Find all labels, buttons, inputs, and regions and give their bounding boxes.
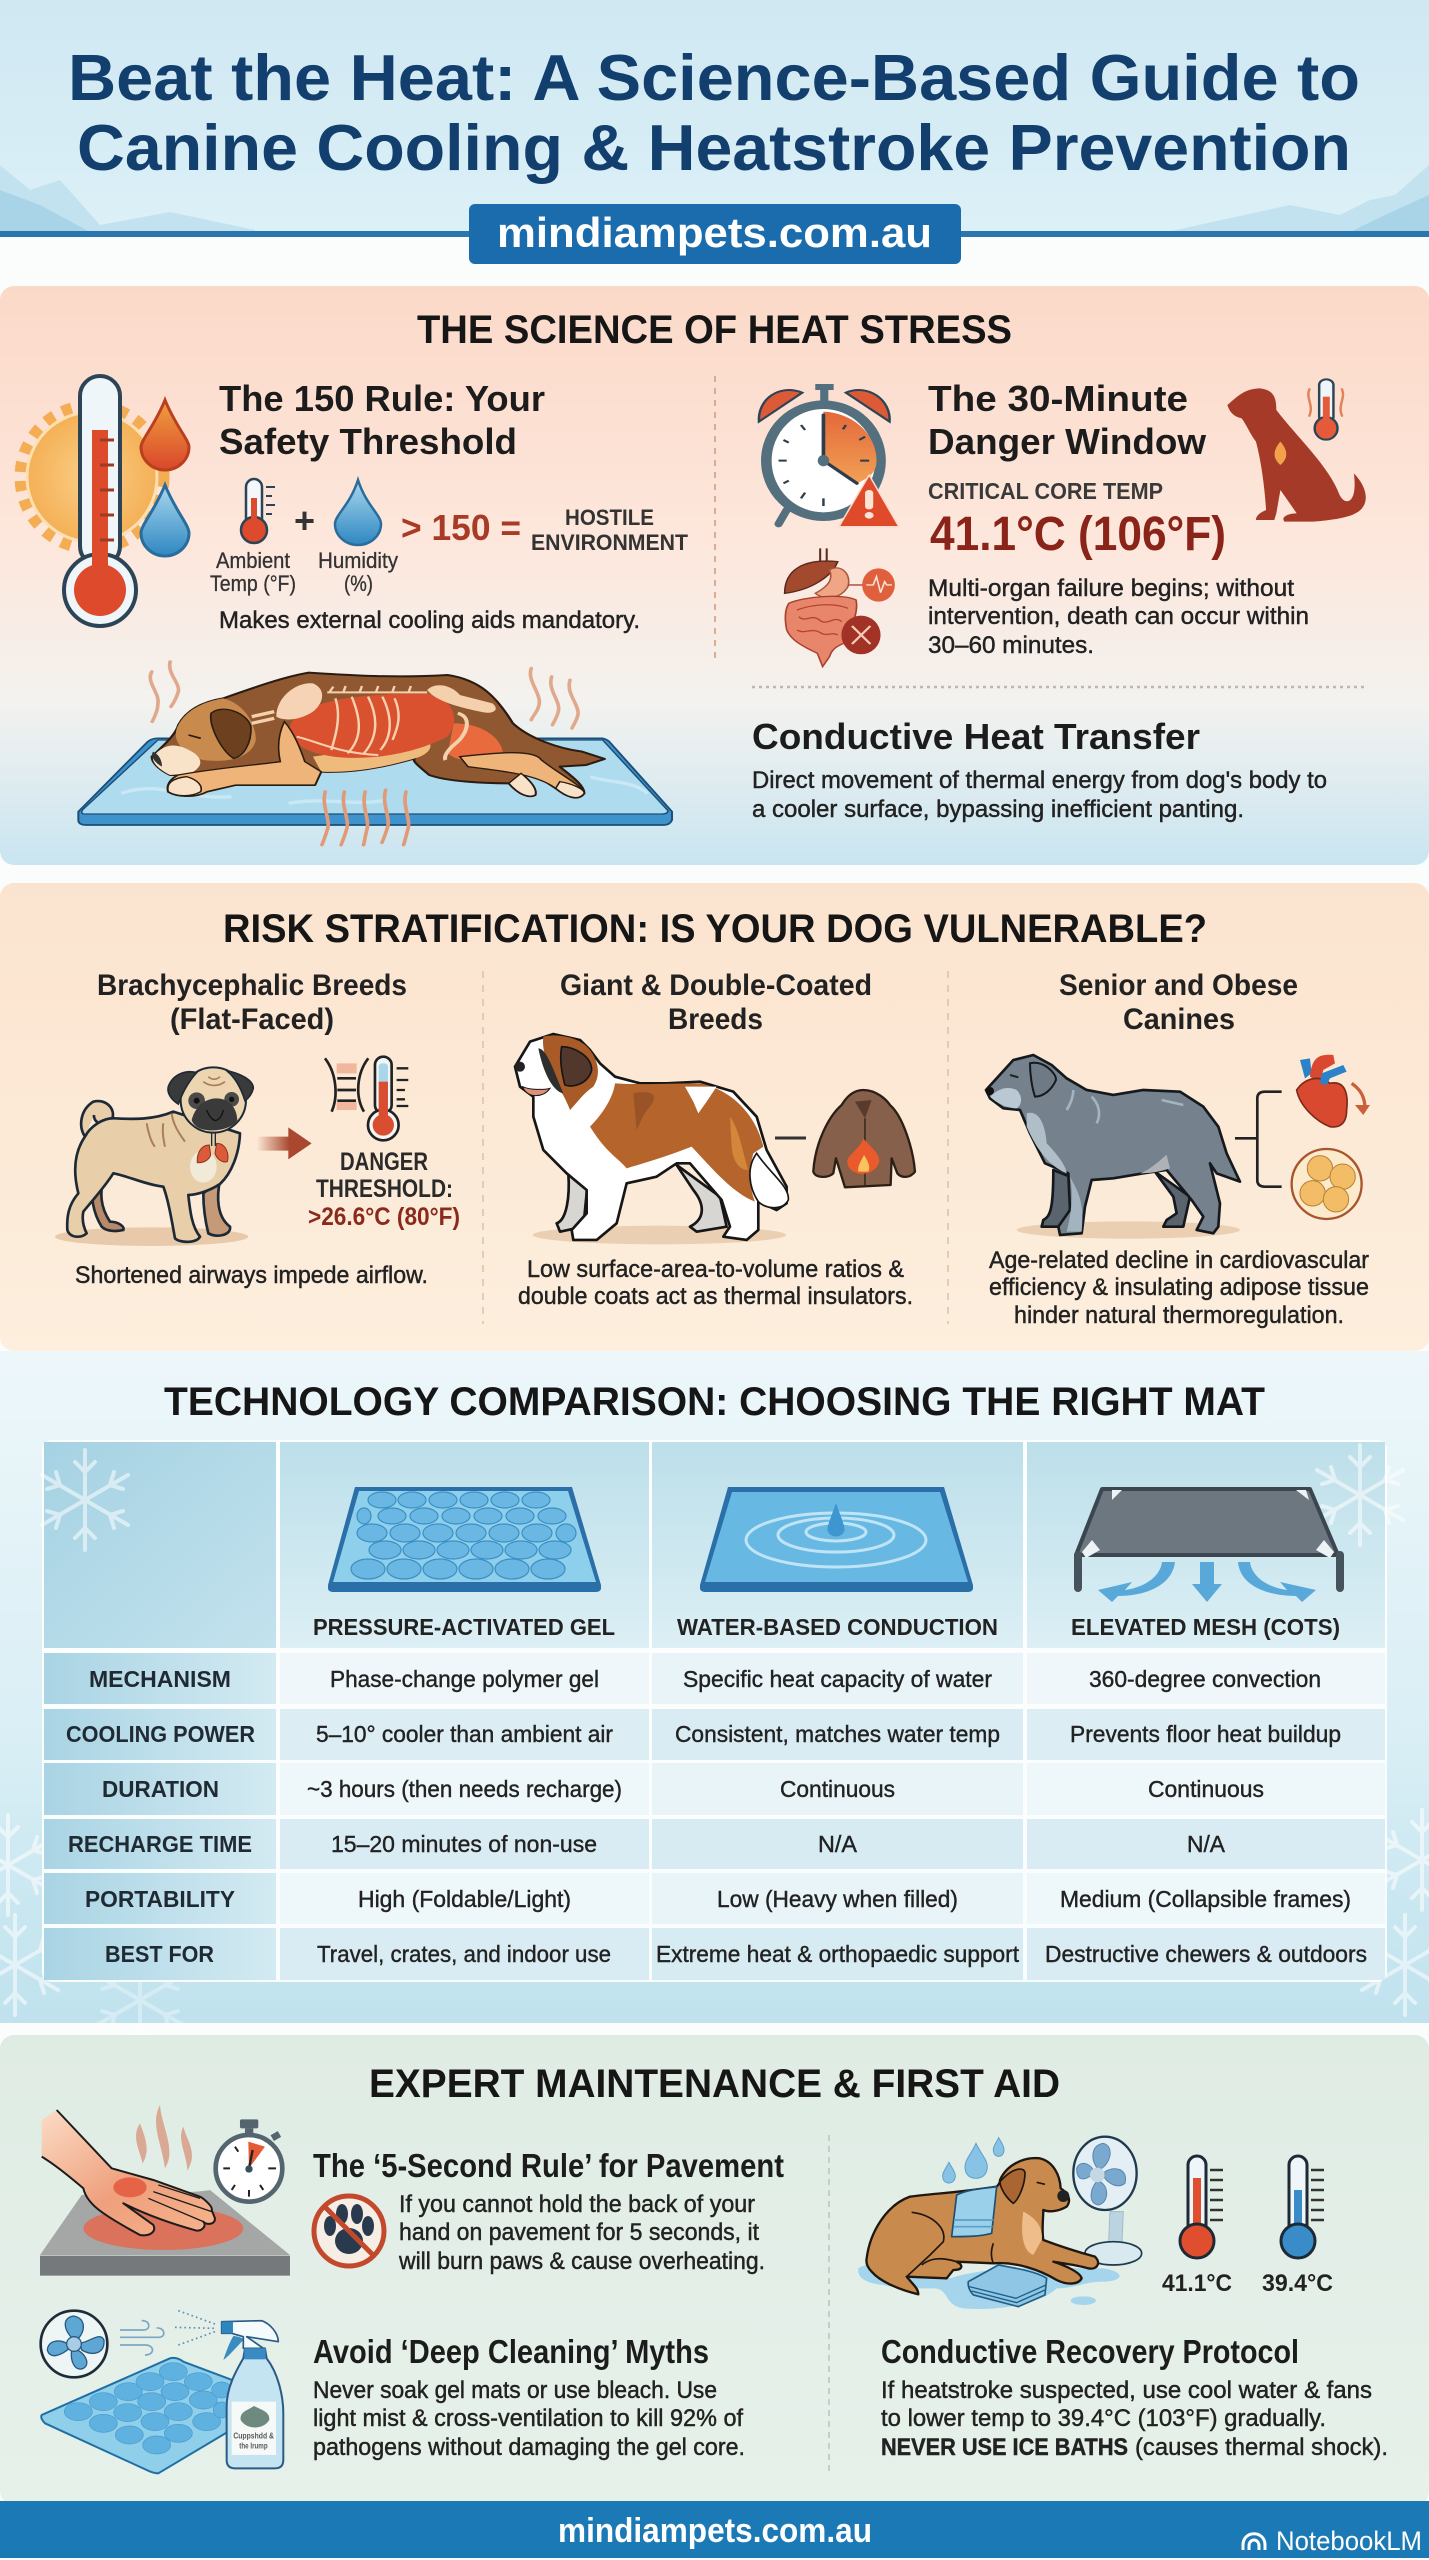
row labels	[66, 1666, 255, 1967]
icon: gel mat	[328, 1487, 601, 1592]
website pill: mindiampets.com.au	[497, 209, 932, 256]
column headers: WATER-BASED CONDUCTION	[677, 1614, 998, 1640]
labels: thermometer values: 39.4°C	[1262, 2270, 1333, 2297]
heading: senior and obese: Senior and Obese	[1059, 969, 1298, 1002]
column values: water: N/A	[818, 1831, 858, 1857]
heading: giant breeds: Giant & Double-Coated	[560, 969, 872, 1002]
column values: water: Specific heat capacity of water	[683, 1666, 992, 1692]
column values: water: Continuous	[780, 1776, 895, 1802]
icon: heart	[1297, 1055, 1370, 1127]
column values: water: Low (Heavy when filled)	[717, 1886, 958, 1912]
text: deep cleaning: pathogens without damaging the gel core.	[313, 2434, 745, 2461]
text: deep cleaning: Never soak gel mats or use bleach. Use	[313, 2377, 717, 2404]
row labels: MECHANISM	[89, 1666, 231, 1692]
icon: gel mat diamond	[41, 2358, 237, 2473]
column values: mesh: 360-degree convection	[1089, 1666, 1321, 1692]
text: recovery protocol: If heatstroke suspected, use cool water & fans	[881, 2377, 1372, 2404]
text: shortened airways: Shortened airways impede airflow.	[75, 1262, 428, 1289]
text: 5-second rule: hand on pavement for 5 seconds, it	[399, 2219, 759, 2246]
heading: 150 rule	[219, 378, 545, 462]
heading: 150 rule: The 150 Rule: Your	[219, 378, 545, 419]
label: notebooklm: NotebookLM	[1276, 2526, 1422, 2556]
column values: gel: Travel, crates, and indoor use	[317, 1941, 611, 1967]
icon: notebooklm logo	[1243, 2534, 1265, 2550]
column values: gel: High (Foldable/Light)	[358, 1886, 571, 1912]
bracket: dog to risk factors	[1235, 1092, 1282, 1187]
arrow: pug to danger	[257, 1127, 312, 1159]
icon: spray bottle	[222, 2321, 283, 2468]
heading: recovery protocol: Conductive Recovery Protocol	[881, 2333, 1299, 2370]
label: danger threshold: >26.6°C (80°F)	[308, 1203, 460, 1231]
icon: air and mist	[120, 2311, 215, 2355]
header band	[0, 0, 1429, 237]
labels: ambient temp and humidity: Temp (°F)	[210, 571, 296, 596]
website pill	[469, 204, 961, 264]
icon: humidity drop	[335, 480, 381, 545]
heading: deep cleaning myths: Avoid ‘Deep Cleaning’ Myths	[313, 2333, 709, 2370]
text: deep cleaning: light mist & cross-ventilation to kill 92% of	[313, 2405, 743, 2432]
icon: no paw	[314, 2196, 384, 2266]
text: senior explanation: Age-related decline in cardiovascular	[989, 1247, 1369, 1274]
heading: maintenance: EXPERT MAINTENANCE & FIRST AID	[369, 2062, 1060, 2106]
text: senior explanation	[989, 1247, 1369, 1329]
text: giant breeds explanation	[518, 1256, 913, 1310]
icon: st bernard	[515, 1034, 788, 1244]
heading: conductive heat transfer: Conductive Heat Transfer	[752, 716, 1200, 757]
heading: brachycephalic breeds: (Flat-Faced)	[170, 1003, 334, 1036]
label: danger threshold: DANGER	[340, 1148, 428, 1176]
text: recovery protocol: NEVER USE ICE BATHS	[881, 2434, 1128, 2461]
heading: giant breeds: Breeds	[668, 1003, 763, 1036]
icon: airway and thermometer	[325, 1057, 408, 1140]
heading: 30-minute window	[928, 378, 1207, 462]
icon: blue drop	[141, 485, 189, 556]
row labels: DURATION	[102, 1776, 219, 1802]
heading: 30-minute window: The 30-Minute	[928, 378, 1188, 419]
text: conductive explanation: a cooler surface, bypassing inefficient panting.	[752, 796, 1244, 823]
text: multi-organ failure: 30–60 minutes.	[928, 632, 1094, 659]
row labels: COOLING POWER	[66, 1721, 255, 1747]
icon: hand on hot pavement	[40, 2105, 290, 2276]
row labels: PORTABILITY	[85, 1886, 235, 1912]
column values: gel: 5–10° cooler than ambient air	[316, 1721, 613, 1747]
text: multi-organ failure: Multi-organ failure begins; without	[928, 575, 1294, 602]
title: Beat the Heat: A Science-Based Guide to	[68, 41, 1360, 114]
icon: red thermometer	[1180, 2156, 1223, 2258]
panel: maintenance and first aid	[0, 2035, 1429, 2505]
icon: thermometer by dog	[1308, 379, 1343, 440]
heading: science of heat stress: THE SCIENCE OF HEAT STRESS	[417, 308, 1012, 352]
icon: standing fan	[1073, 2137, 1142, 2265]
column values: gel: ~3 hours (then needs recharge)	[307, 1776, 622, 1802]
icon: organs	[785, 548, 895, 667]
value: critical temperature: 41.1°C (106°F)	[930, 508, 1226, 561]
text: 5-second rule: will burn paws & cause overheating.	[398, 2248, 765, 2275]
icon: red dog silhouette	[1227, 388, 1366, 522]
text: giant breeds explanation: double coats act as thermal insulators.	[518, 1283, 913, 1310]
heading: 30-minute window: Danger Window	[928, 421, 1207, 462]
row labels: BEST FOR	[105, 1941, 214, 1967]
icon: sun	[21, 406, 163, 548]
label: critical core temp: CRITICAL CORE TEMP	[928, 478, 1163, 504]
title	[68, 41, 1360, 184]
labels: ambient temp and humidity: (%)	[344, 571, 373, 596]
heading: senior and obese	[1059, 969, 1298, 1036]
labels: ambient temp and humidity: Ambient	[216, 548, 290, 573]
heading: 5-second rule: The ‘5-Second Rule’ for Pavement	[313, 2147, 784, 2184]
text: giant breeds explanation: Low surface-area-to-volume ratios &	[527, 1256, 904, 1283]
column values: mesh	[1045, 1666, 1367, 1967]
plus sign: +	[294, 500, 315, 541]
panel: technology comparison	[0, 1351, 1429, 2050]
label: hostile environment	[531, 505, 689, 555]
footer	[0, 2501, 1429, 2558]
column headers: ELEVATED MESH (COTS)	[1071, 1614, 1340, 1640]
icon: small thermometer	[241, 479, 275, 543]
column values: water: Extreme heat & orthopaedic support	[656, 1941, 1020, 1967]
text: recovery protocol: (causes thermal shock).	[1135, 2434, 1388, 2461]
icon: grey senior dog	[986, 1055, 1240, 1239]
text: multi-organ failure: intervention, death can occur within	[928, 603, 1309, 630]
formula result: > 150 =	[401, 507, 521, 548]
panel: science of heat stress	[0, 286, 1429, 865]
text: recovery protocol	[881, 2377, 1388, 2461]
icon: stopwatch	[216, 2119, 282, 2202]
icon: blue thermometer	[1281, 2156, 1324, 2258]
label: hostile environment: HOSTILE	[565, 505, 654, 530]
text: mandatory aids: Makes external cooling aids mandatory.	[219, 607, 640, 634]
icon: spray bottle: the Irump	[239, 2441, 268, 2450]
footer: mindiampets.com.au	[558, 2512, 872, 2550]
heading: brachycephalic breeds	[97, 969, 407, 1036]
label: danger threshold: THRESHOLD:	[316, 1175, 453, 1203]
icon: pug	[55, 1067, 253, 1246]
title: Canine Cooling & Heatstroke Prevention	[77, 111, 1351, 184]
icon: orange drop	[141, 400, 189, 470]
labels: thermometer values: 41.1°C	[1162, 2270, 1232, 2297]
column values: mesh: Prevents floor heat buildup	[1070, 1721, 1341, 1747]
icon: fat cells	[1292, 1149, 1362, 1219]
heading: giant breeds	[560, 969, 872, 1036]
table	[42, 1440, 1403, 1982]
column values: gel: 15–20 minutes of non-use	[331, 1831, 597, 1857]
labels: thermometer values	[1162, 2270, 1333, 2297]
icon: alarm clock	[759, 384, 890, 524]
row labels: RECHARGE TIME	[68, 1831, 252, 1857]
labels: ambient temp and humidity	[210, 548, 398, 596]
column values: water	[656, 1666, 1020, 1967]
text: conductive explanation: Direct movement of thermal energy from dog's body to	[752, 767, 1327, 794]
column values: gel	[307, 1666, 622, 1967]
heading: 150 rule: Safety Threshold	[219, 421, 517, 462]
heading: technology comparison: TECHNOLOGY COMPARISON: CHOOSING THE RIGHT MAT	[164, 1380, 1265, 1424]
column values: gel: Phase-change polymer gel	[330, 1666, 599, 1692]
column headers: PRESSURE-ACTIVATED GEL	[313, 1614, 615, 1640]
column values: mesh: Continuous	[1148, 1776, 1264, 1802]
column values: mesh: Destructive chewers & outdoors	[1045, 1941, 1367, 1967]
heading: brachycephalic breeds: Brachycephalic Breeds	[97, 969, 407, 1002]
column values: mesh: Medium (Collapsible frames)	[1060, 1886, 1351, 1912]
icon: warning triangle	[839, 475, 899, 527]
label: hostile environment: ENVIRONMENT	[531, 530, 689, 555]
icon: elevated cot	[1076, 1489, 1340, 1602]
column headers	[313, 1614, 1340, 1640]
icon: water mat	[700, 1487, 973, 1592]
icon: fan	[41, 2311, 107, 2377]
icon: jacket with flame	[813, 1090, 915, 1187]
icon: dog recovering with towel	[858, 2138, 1120, 2309]
heading: senior and obese: Canines	[1123, 1003, 1235, 1036]
text: conductive explanation	[752, 767, 1327, 823]
icon: dog lying on cooling mat	[78, 662, 672, 845]
text: senior explanation: efficiency & insulating adipose tissue	[989, 1274, 1369, 1301]
text: multi-organ failure	[928, 575, 1309, 659]
column values: water: Consistent, matches water temp	[675, 1721, 1000, 1747]
text: 5-second rule: If you cannot hold the back of your	[399, 2191, 755, 2218]
heading: risk stratification: RISK STRATIFICATION: IS YOUR DOG VULNERABLE?	[223, 907, 1207, 951]
icon: large thermometer	[64, 376, 136, 626]
labels: ambient temp and humidity: Humidity	[318, 548, 398, 573]
panel: risk stratification	[0, 883, 1429, 1351]
label: danger threshold	[308, 1148, 460, 1231]
text: recovery protocol: to lower temp to 39.4°C (103°F) gradually.	[881, 2405, 1326, 2432]
text: senior explanation: hinder natural thermoregulation.	[1014, 1302, 1344, 1329]
text: 5-second rule	[398, 2191, 765, 2275]
icon: spray bottle: Cuppshdd &	[233, 2431, 274, 2440]
column values: mesh: N/A	[1187, 1831, 1226, 1857]
text: deep cleaning	[313, 2377, 745, 2461]
